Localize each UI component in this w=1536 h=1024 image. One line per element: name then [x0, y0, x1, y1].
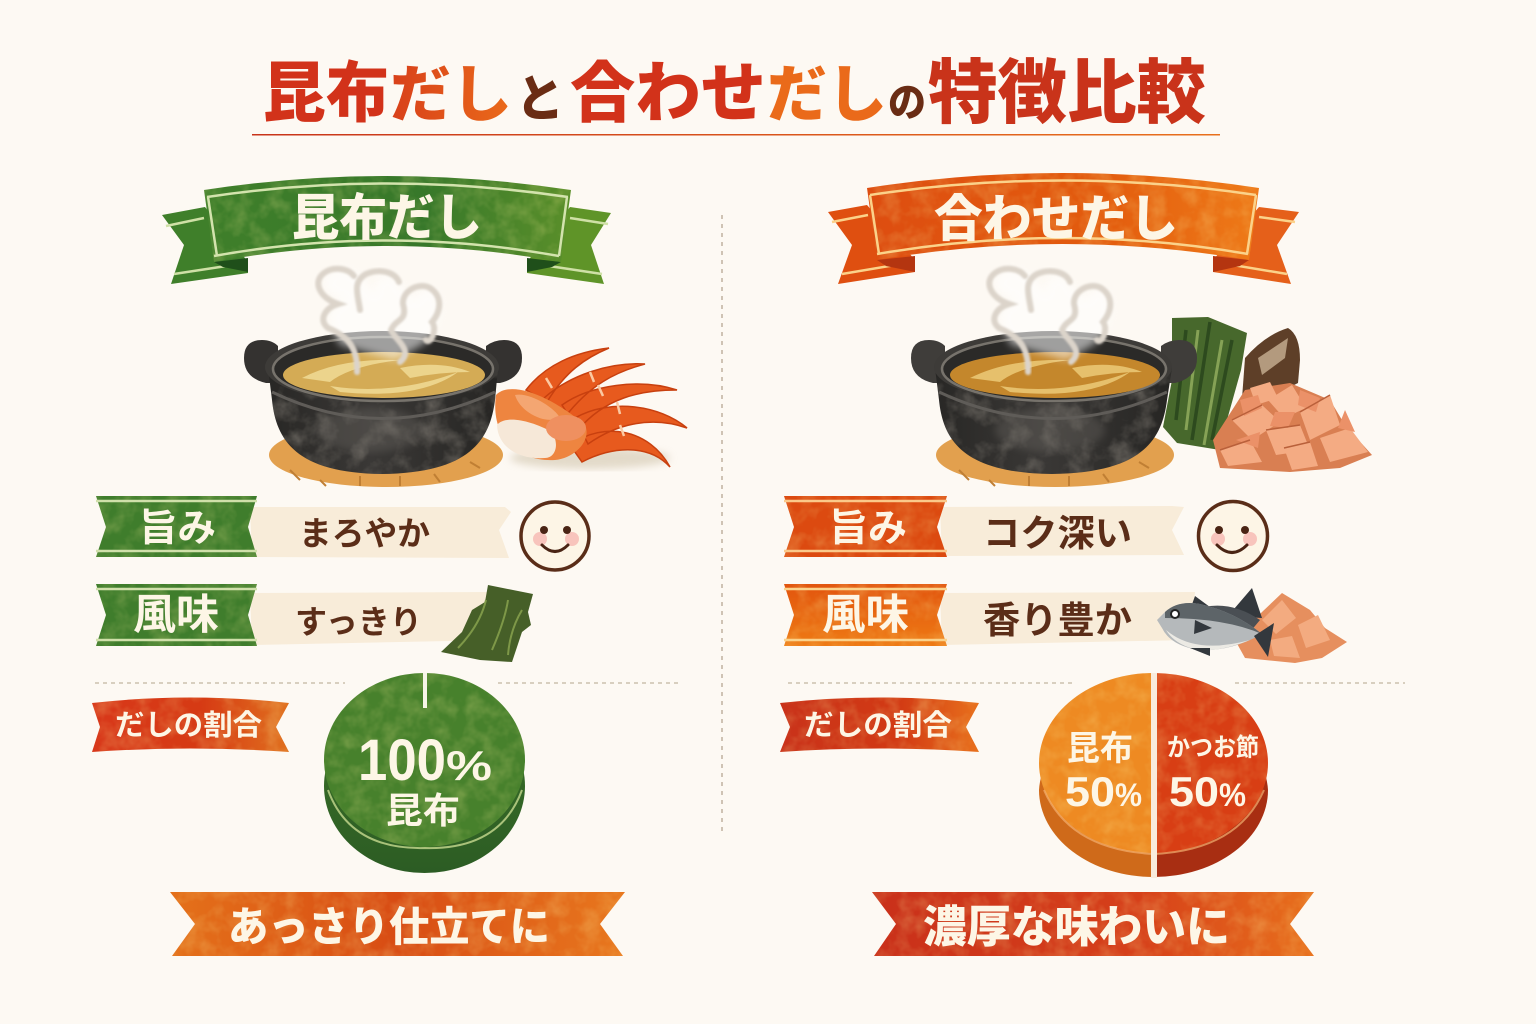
title: だし — [767, 44, 887, 134]
banner: kombu dashi: 昆布だし — [292, 178, 482, 250]
banner: awase dashi: 合わせだし — [934, 179, 1178, 251]
ribbon: ratio label — [92, 698, 289, 752]
pie chart: kombu 100% — [324, 673, 525, 873]
label ribbon — [96, 496, 511, 558]
icon: steaming pot — [911, 269, 1197, 487]
icon: bonito flakes small — [1235, 593, 1347, 663]
pie chart: kombu 100%: 昆布 — [386, 782, 460, 834]
label ribbon — [784, 581, 1195, 646]
callout: light taste — [170, 892, 625, 956]
row: umami: まろやか — [299, 507, 430, 555]
pie chart: kombu 50 / bonito 50: % — [1219, 777, 1246, 813]
ribbon: ratio label: だしの割合 — [804, 702, 952, 744]
title: だし — [390, 44, 512, 134]
callout: rich taste: 濃厚な味わいに — [923, 891, 1230, 955]
icon: steaming pot — [244, 269, 522, 487]
icon: crab — [495, 348, 687, 469]
pie chart: kombu 50 / bonito 50: 50 — [1169, 768, 1219, 815]
label ribbon — [96, 581, 500, 646]
row: flavor — [784, 581, 1195, 646]
row: flavor — [96, 581, 500, 646]
pie chart: kombu 50 / bonito 50: かつお節 — [1167, 728, 1259, 764]
panel: kombu dashi — [92, 176, 687, 956]
panel: awase dashi — [780, 173, 1405, 956]
value: 100 — [358, 728, 446, 793]
callout: rich taste — [872, 891, 1314, 956]
row: umami — [784, 496, 1184, 557]
title: 特徴比較 — [928, 37, 1206, 138]
banner: awase dashi — [828, 173, 1299, 284]
pie chart: kombu 50 / bonito 50: % — [1115, 777, 1142, 813]
icon: kelp, shiitake, bonito flakes — [1163, 317, 1372, 472]
label ribbon: 旨み — [139, 497, 216, 552]
segment labels: 昆布 — [1067, 721, 1133, 770]
label ribbon — [784, 496, 1184, 557]
icon: smile — [521, 502, 589, 570]
pie chart: kombu 50 / bonito 50: 50 — [1065, 768, 1115, 815]
label ribbon: 旨み — [829, 497, 907, 552]
label ribbon: 風味 — [133, 581, 219, 642]
icon: bonito fish — [1157, 588, 1274, 657]
label ribbon: 風味 — [822, 581, 909, 642]
icon: kombu piece — [441, 585, 533, 662]
pie chart: kombu 50 / bonito 50 — [1039, 673, 1268, 878]
ribbon: ratio label — [780, 698, 979, 752]
pie chart: kombu 100%: % — [446, 742, 492, 789]
title: の — [888, 70, 926, 128]
ribbon: ratio label: だしの割合 — [115, 702, 262, 744]
icon: smile — [1198, 502, 1268, 570]
row: flavor: 香り豊か — [983, 590, 1132, 644]
callout: light taste: あっさり仕立てに — [228, 893, 550, 953]
title: 昆布 — [263, 40, 389, 136]
row: flavor: すっきり — [295, 597, 422, 643]
banner: kombu dashi — [162, 176, 611, 284]
row: umami — [96, 496, 511, 558]
title: 合わせ — [570, 40, 766, 136]
row: umami: コク深い — [983, 503, 1132, 557]
title — [263, 37, 1206, 138]
title: と — [516, 59, 564, 131]
